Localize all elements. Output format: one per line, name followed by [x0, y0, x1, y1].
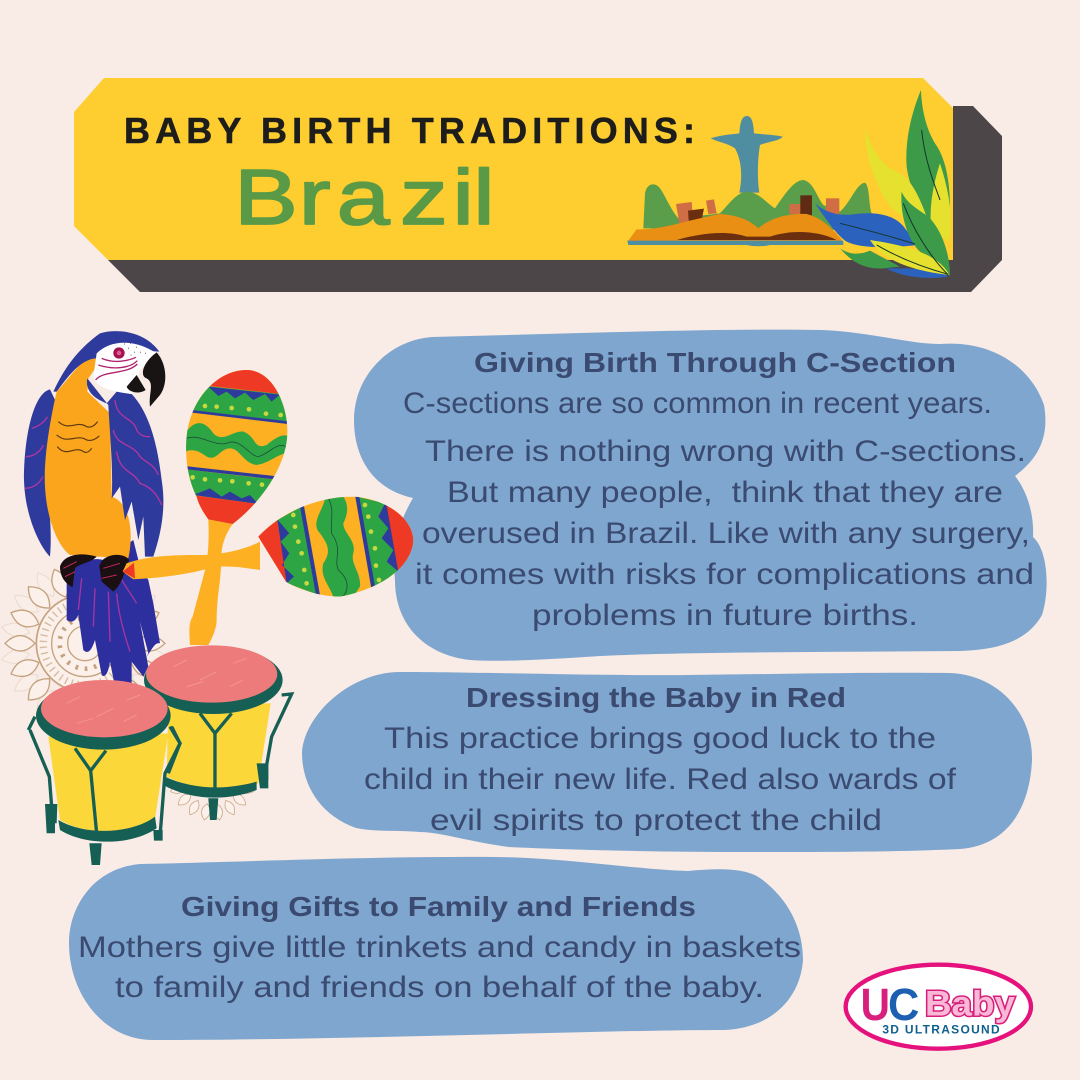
parrot body [45, 356, 131, 558]
body text: C-sections are so common in recent years. [403, 387, 992, 420]
icon: green hills [643, 180, 872, 230]
left drum frame [28, 717, 180, 837]
parrot claws [60, 554, 129, 592]
mandala behind parrot and drums [0, 559, 255, 821]
heading: Giving Birth Through C-Section [474, 347, 956, 378]
logo: UC Baby 3D Ultrasound [846, 965, 1031, 1049]
parrot head hood [53, 331, 159, 392]
panel shape [302, 672, 1032, 852]
small mandala under right drum [169, 782, 255, 821]
body text: to family and friends on behalf of the baby. [115, 971, 764, 1004]
icon: green lower feather [840, 248, 900, 268]
illustration: Rio skyline on an open book with feathers [627, 90, 951, 278]
parrot face dots [124, 343, 146, 355]
icon: blue lower feather [887, 268, 948, 278]
left drum head texture [67, 695, 140, 723]
body text [364, 722, 957, 837]
left drum body [48, 733, 168, 831]
body text: Mothers give little trinkets and candy in baskets [78, 931, 801, 964]
title text: BABY BIRTH TRADITIONS: [124, 110, 695, 151]
heading: Dressing the Baby in Red [466, 682, 846, 713]
chest feather lines [57, 422, 99, 452]
panel shape [354, 330, 1047, 661]
right drum head [146, 645, 277, 703]
banner shadow [108, 106, 1002, 292]
panel shape [69, 857, 803, 1040]
logo oval [846, 965, 1031, 1049]
body text: This practice brings good luck to the [384, 722, 936, 755]
icon: blue feather [815, 203, 918, 247]
logo tagline: 3D ULTRASOUND [882, 1023, 1000, 1037]
handle tip [123, 563, 135, 579]
icon: Christ the Redeemer statue [711, 116, 783, 193]
icon: buildings [676, 195, 839, 223]
logo U: U [861, 979, 890, 1030]
maracas [123, 367, 417, 645]
left drum base [45, 804, 163, 865]
tail lines [78, 578, 137, 652]
icon: yellow left feather [865, 128, 928, 222]
wing feather lines [25, 400, 162, 505]
horizontal maraca head [258, 496, 414, 597]
parrot lower beak [127, 375, 146, 392]
right drum frame [168, 694, 292, 788]
feather veins [840, 130, 948, 275]
body text: problems in future births. [532, 599, 918, 632]
body text [78, 931, 801, 1004]
body text: But many people, think that they are [447, 476, 1003, 509]
parrot right wing [87, 378, 163, 557]
bongo drums [28, 645, 292, 865]
right drum [144, 645, 292, 820]
panel: C-section [354, 330, 1047, 661]
vertical maraca head [186, 370, 288, 524]
mandala petals [0, 559, 170, 723]
parrot face lines [96, 357, 137, 380]
body text: evil spirits to protect the child [430, 804, 882, 837]
icon: yellow lower feather [870, 240, 949, 275]
panel: giving gifts [69, 857, 803, 1040]
body text: There is nothing wrong with C-sections. [425, 435, 1026, 468]
logo Baby: Baby [925, 984, 1015, 1023]
parrot [24, 331, 165, 688]
left drum rim [36, 682, 171, 750]
right drum rim [144, 646, 283, 714]
body text [403, 387, 1034, 632]
logo C: C [888, 979, 919, 1030]
body text: it comes with risks for complications and [415, 558, 1034, 591]
parrot left wing [24, 389, 57, 557]
vertical maraca handle [189, 519, 233, 645]
body text: overused in Brazil. Like with any surgery, [422, 517, 1030, 550]
parrot face [93, 343, 157, 394]
icon: green centre feather [901, 192, 950, 276]
icon: green tall feather [906, 90, 950, 222]
heading: Giving Gifts to Family and Friends [181, 891, 696, 922]
right drum base [163, 763, 268, 820]
icon: yellow right feather [931, 163, 951, 242]
left drum [28, 680, 180, 865]
parrot tail [67, 540, 160, 688]
panel: dressing in red [302, 672, 1032, 852]
parrot eye [113, 347, 125, 359]
icon: open book [627, 214, 843, 246]
subtitle: Brazil: Brazil [234, 154, 495, 241]
body text: child in their new life. Red also wards of [364, 763, 957, 796]
right drum head texture [173, 658, 247, 687]
parrot beak [143, 352, 165, 407]
left drum head [41, 680, 168, 737]
horizontal maraca handle [123, 542, 260, 579]
title banner [74, 78, 1002, 292]
right drum body [167, 703, 271, 789]
banner face [74, 78, 953, 260]
